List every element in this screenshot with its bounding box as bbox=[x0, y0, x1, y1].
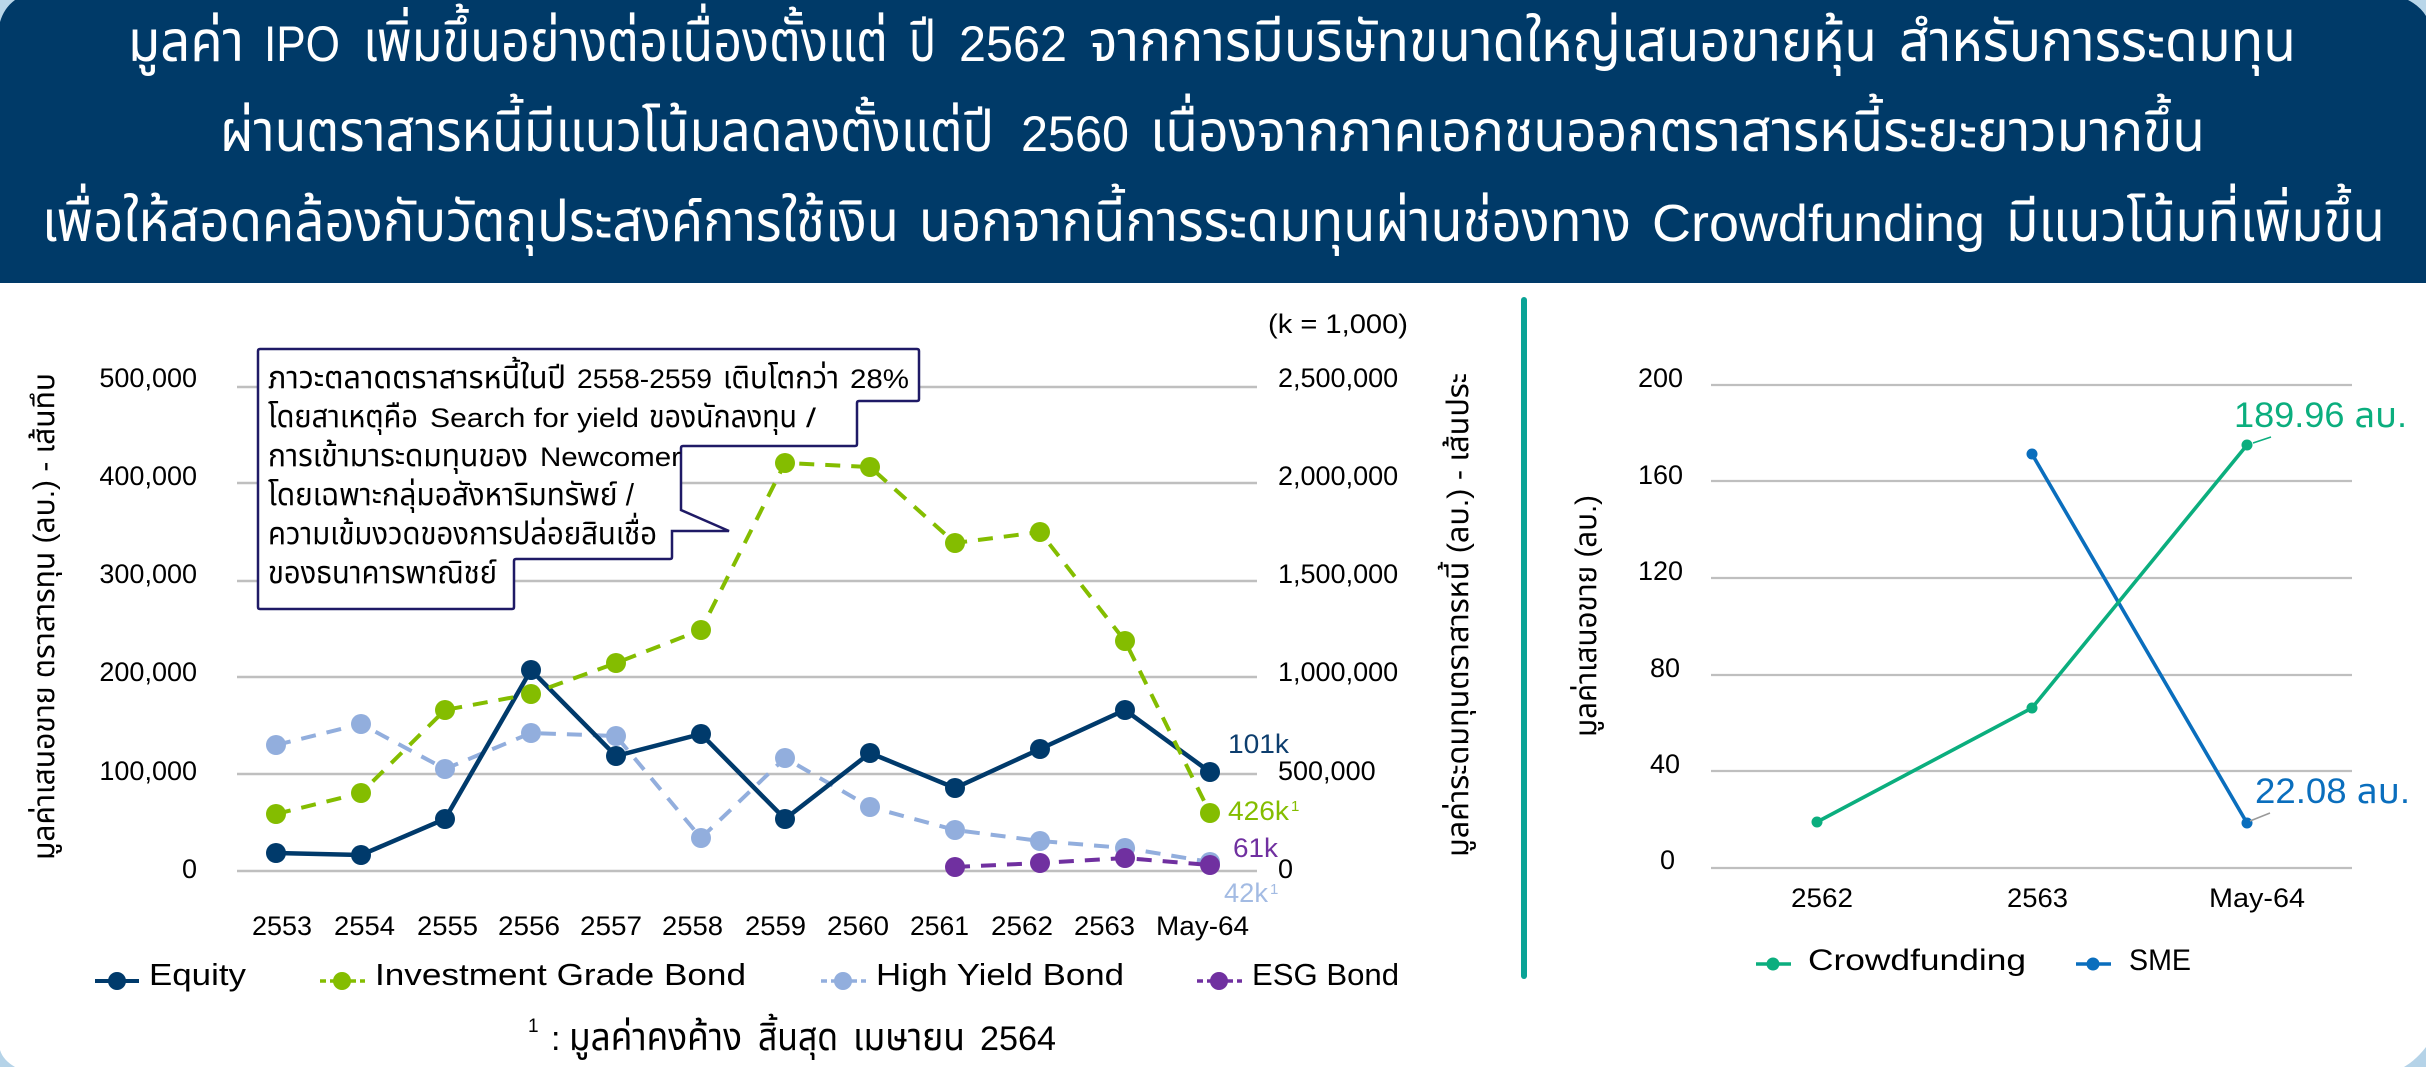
x axis labels: 2557 bbox=[580, 911, 642, 941]
left axis labels: 100,000 bbox=[99, 756, 197, 786]
legend: left chart: ESG Bond bbox=[1252, 957, 1399, 992]
axis labels bbox=[1638, 363, 1683, 875]
callout: bond market growth: Newcomer bbox=[540, 442, 681, 472]
series: Crowdfunding bbox=[1812, 440, 2252, 828]
x axis labels: 2562 bbox=[1791, 883, 1853, 913]
callout: bond market growth: โดยสาเหตุคือ bbox=[268, 399, 418, 435]
header banner bbox=[0, 0, 2426, 283]
data label: Equity 101k: 101k bbox=[1228, 729, 1290, 759]
callout: bond market growth: ของธนาคารพาณิชย์ bbox=[268, 555, 497, 590]
left axis title: มูลค่าเสนอขาย ตราสารทุน (ลบ.) - เส้นทึบ bbox=[28, 373, 62, 860]
series: High Yield Bond bbox=[266, 714, 1220, 872]
legend: left chart: Equity bbox=[149, 957, 247, 992]
left axis labels: 300,000 bbox=[99, 559, 197, 589]
callout: bond market growth: / bbox=[806, 403, 817, 433]
axis labels: 40 bbox=[1650, 749, 1680, 779]
footnote: : bbox=[551, 1020, 560, 1058]
legend: right chart: SME bbox=[2129, 944, 2191, 977]
heading line 1: มูลค่า bbox=[128, 10, 244, 76]
legend: right chart: Crowdfunding bbox=[1808, 944, 2026, 977]
axis labels: 160 bbox=[1638, 460, 1683, 490]
series: Equity bbox=[266, 660, 1220, 865]
callout: bond market growth: ความเข้มงวดของการปล่อยสินเชื่อ bbox=[268, 512, 657, 551]
x axis labels: 2563 bbox=[2007, 883, 2068, 913]
data label: SME value: 22.08 ลบ. bbox=[2255, 772, 2410, 811]
heading line 1: 2562 bbox=[959, 16, 1067, 72]
footnote: 2564 bbox=[980, 1020, 1056, 1058]
x axis labels: 2561 bbox=[910, 911, 969, 941]
data label: High Yield 42k: 1 bbox=[1270, 881, 1278, 898]
right axis labels bbox=[1278, 363, 1398, 884]
left axis labels: 200,000 bbox=[99, 657, 197, 687]
callout: bond market growth: โดยเฉพาะกลุ่มอสังหาริมทรัพย์ / bbox=[268, 477, 634, 513]
heading line 3: มีแนวโน้มที่เพิ่มขึ้น bbox=[2006, 183, 2385, 254]
footnote: มูลค่าคงค้าง bbox=[569, 1017, 742, 1060]
data label: Crowdfunding value: 189.96 ลบ. bbox=[2234, 396, 2407, 435]
axis labels: 200 bbox=[1638, 363, 1683, 393]
heading line 2: ผ่านตราสารหนี้มีแนวโน้มลดลงตั้งแต่ปี bbox=[220, 93, 994, 164]
axis title: มูลค่าเสนอขาย (ลบ.) bbox=[1570, 495, 1604, 737]
callout: bond market growth: การเข้ามาระดมทุนของ bbox=[268, 438, 528, 474]
panel: left capital raising chart bbox=[28, 309, 1476, 1060]
callout: bond market growth: ของนักลงทุน bbox=[649, 399, 797, 435]
x axis labels: 2560 bbox=[827, 911, 889, 941]
heading line 2: 2560 bbox=[1021, 106, 1129, 162]
unit note: (k = 1,000) bbox=[1268, 309, 1408, 339]
x axis labels: 2559 bbox=[745, 911, 806, 941]
data label: ESG 61k: 61k bbox=[1233, 833, 1279, 863]
callout: bond market growth: 2558-2559 bbox=[577, 364, 712, 394]
axis labels: 80 bbox=[1650, 653, 1680, 683]
footnote: สิ้นสุด bbox=[758, 1013, 838, 1060]
data label: High Yield 42k: 42k bbox=[1224, 878, 1268, 908]
x axis labels: 2558 bbox=[662, 911, 723, 941]
heading line 1: เพิ่มขึ้นอย่างต่อเนื่องตั้งแต่ bbox=[363, 3, 888, 74]
x axis labels: 2554 bbox=[334, 911, 395, 941]
heading line 2 bbox=[220, 93, 2205, 164]
x axis labels: May-64 bbox=[2209, 883, 2305, 913]
x axis labels: 2563 bbox=[1074, 911, 1135, 941]
footnote: 1 bbox=[528, 1016, 539, 1037]
legend: left chart bbox=[95, 957, 1399, 992]
x axis labels: 2562 bbox=[991, 911, 1053, 941]
right axis title: มูลค่าระดมทุนตราสารหนี้ (ลบ.) - เส้นประ bbox=[1437, 373, 1476, 857]
heading line 2: เนื่องจากภาคเอกชนออกตราสารหนี้ระยะยาวมากขึ้น bbox=[1150, 93, 2205, 164]
heading line 3: เพื่อให้สอดคล้องกับวัตถุประสงค์การใช้เงิน bbox=[42, 183, 899, 256]
callout: bond market growth bbox=[258, 349, 919, 609]
legend: right chart bbox=[1756, 944, 2191, 977]
callout: bond market growth: ภาวะตลาดตราสารหนี้ในปี bbox=[268, 356, 566, 395]
footnote bbox=[528, 1013, 1056, 1060]
callout: bond market growth: เติบโตกว่า bbox=[723, 360, 839, 395]
right axis labels: 500,000 bbox=[1278, 756, 1376, 786]
right axis labels: 1,000,000 bbox=[1278, 657, 1398, 687]
data label: Investment Grade 426k: 426k bbox=[1228, 796, 1290, 826]
series: Investment Grade Bond bbox=[266, 453, 1220, 824]
heading line 3 bbox=[42, 183, 2385, 256]
vertical divider bbox=[1521, 297, 1527, 979]
legend: left chart: High Yield Bond bbox=[876, 957, 1124, 992]
x axis labels: 2553 bbox=[252, 911, 312, 941]
x axis labels bbox=[252, 911, 1249, 941]
callout: bond market growth: 28% bbox=[850, 364, 909, 394]
heading line 3: Crowdfunding bbox=[1652, 195, 1985, 253]
axis labels: 120 bbox=[1638, 556, 1683, 586]
panel: crowdfunding and SME chart bbox=[1570, 363, 2410, 977]
heading line 1: จากการมีบริษัทขนาดใหญ่เสนอขายหุ้น bbox=[1089, 10, 1877, 76]
data label: Investment Grade 426k: 1 bbox=[1291, 798, 1299, 815]
left axis labels: 500,000 bbox=[99, 363, 197, 393]
callout: bond market growth: Search for yield bbox=[430, 403, 639, 433]
corner decoration: bottom left bbox=[0, 1050, 15, 1067]
heading line 1 bbox=[128, 3, 2296, 76]
right axis labels: 0 bbox=[1278, 854, 1293, 884]
right axis labels: 2,000,000 bbox=[1278, 461, 1398, 491]
axis labels: 0 bbox=[1660, 845, 1675, 875]
left axis labels: 0 bbox=[182, 854, 197, 884]
x axis labels: 2556 bbox=[498, 911, 560, 941]
corner decoration: bottom right bbox=[2404, 1047, 2426, 1067]
right axis labels: 2,500,000 bbox=[1278, 363, 1398, 393]
x axis labels bbox=[1791, 883, 2305, 913]
x axis labels: May-64 bbox=[1156, 911, 1249, 941]
heading line 3: นอกจากนี้การระดมทุนผ่านช่องทาง bbox=[919, 183, 1631, 256]
left axis labels bbox=[99, 363, 197, 884]
heading line 1: ปี bbox=[909, 10, 936, 74]
series: SME bbox=[2026, 448, 2252, 828]
heading line 1: IPO bbox=[264, 16, 340, 72]
footnote: เมษายน bbox=[853, 1017, 965, 1059]
series: ESG Bond bbox=[945, 848, 1220, 877]
left axis labels: 400,000 bbox=[99, 461, 197, 491]
x axis labels: 2555 bbox=[417, 911, 478, 941]
heading line 1: สำหรับการระดมทุน bbox=[1899, 10, 2296, 76]
legend: left chart: Investment Grade Bond bbox=[375, 957, 746, 992]
right axis labels: 1,500,000 bbox=[1278, 559, 1398, 589]
